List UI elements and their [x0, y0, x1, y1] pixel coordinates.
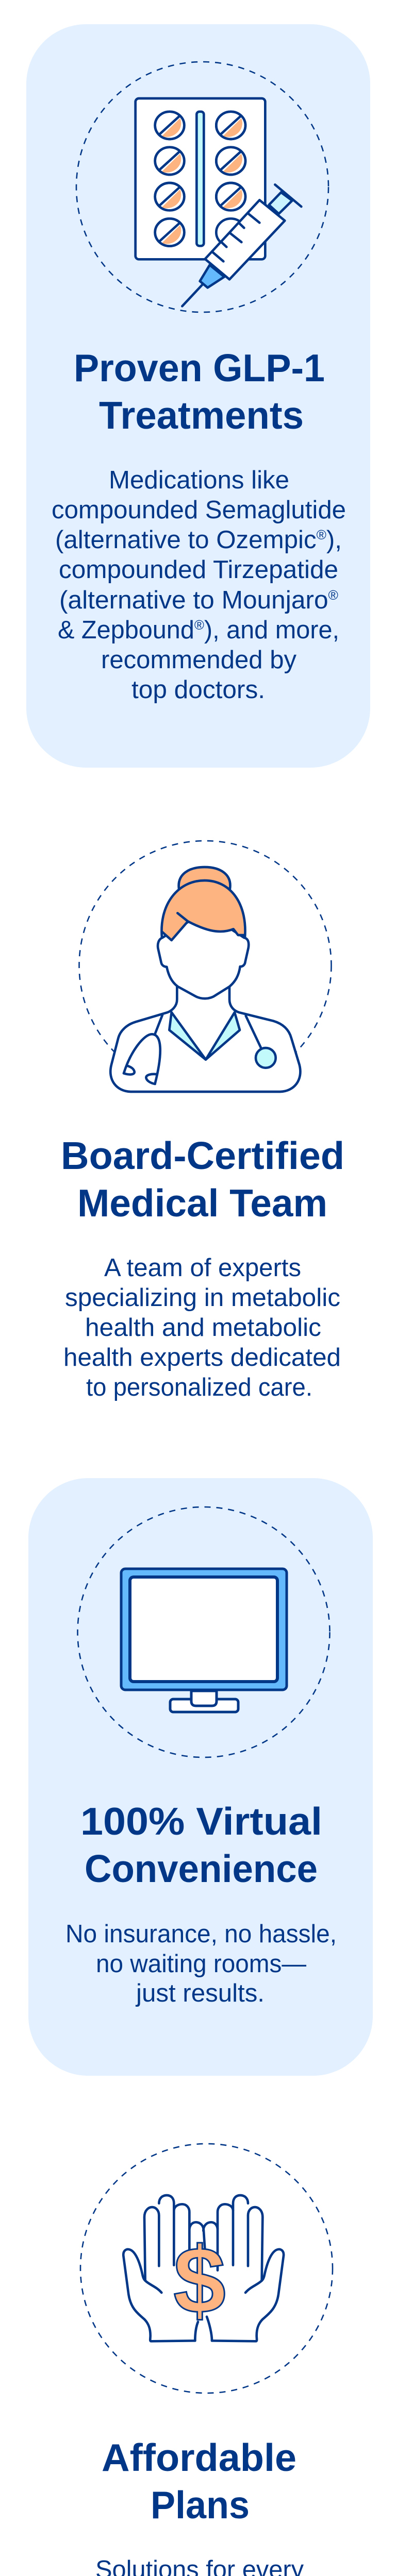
- dashed circle: [76, 62, 328, 312]
- body text: ),: [326, 526, 342, 554]
- body text: Medications like: [109, 466, 289, 494]
- body text: ®: [194, 617, 204, 633]
- heading: Proven GLP-1: [74, 346, 325, 389]
- icon: pill pack and syringe: [136, 98, 301, 306]
- body text: & Zepbound: [58, 616, 195, 644]
- body text: top doctors.: [131, 676, 265, 704]
- heading: Affordable: [102, 2436, 296, 2479]
- dashed circle: [79, 841, 331, 1090]
- body text: (alternative to Mounjaro: [59, 586, 325, 614]
- dashed circle: [77, 1507, 330, 1757]
- body text: health experts dedicated: [63, 1344, 341, 1371]
- card background: [28, 1478, 373, 2076]
- panel: proven treatments: Treatments: [99, 394, 304, 437]
- panel: affordable plans: Plans: [151, 2483, 250, 2527]
- panel: medical team: Medical Team: [77, 1181, 327, 1225]
- body text: ), and more,: [204, 616, 339, 644]
- heading: 100% Virtual: [80, 1800, 322, 1843]
- body text: specializing in metabolic: [65, 1284, 340, 1312]
- panel: proven treatments: [26, 24, 370, 768]
- panel: medical team: [61, 841, 344, 1401]
- icon: hands with dollar: [123, 2195, 284, 2341]
- body text: compounded Semaglutide: [52, 496, 346, 524]
- dollar sign: $: [173, 2227, 226, 2333]
- body text: just results.: [135, 1979, 265, 2007]
- body text: to personalized care.: [86, 1374, 312, 1401]
- dashed circle: [80, 2144, 333, 2393]
- icon: doctor: [110, 867, 300, 1092]
- body text: (alternative to Ozempic: [55, 526, 315, 554]
- icon: monitor: [121, 1569, 287, 1712]
- body text: [52, 466, 346, 704]
- body text: No insurance, no hassle,: [65, 1920, 337, 1948]
- card background: [26, 24, 370, 768]
- body text: recommended by: [101, 646, 297, 674]
- body text: ®: [328, 587, 338, 603]
- body text: health and metabolic: [85, 1314, 321, 1342]
- body text: no waiting rooms—: [96, 1950, 306, 1978]
- panel: affordable plans: [56, 2144, 342, 2576]
- heading: Board-Certified: [61, 1134, 344, 1177]
- body text: compounded Tirzepatide: [59, 556, 338, 584]
- panel: virtual convenience: Convenience: [85, 1847, 318, 1890]
- body text: [63, 1254, 341, 1401]
- body text: [65, 1920, 337, 2007]
- body text: A team of experts: [104, 1254, 301, 1282]
- body text: ®: [317, 527, 326, 543]
- panel: virtual convenience: [28, 1478, 373, 2076]
